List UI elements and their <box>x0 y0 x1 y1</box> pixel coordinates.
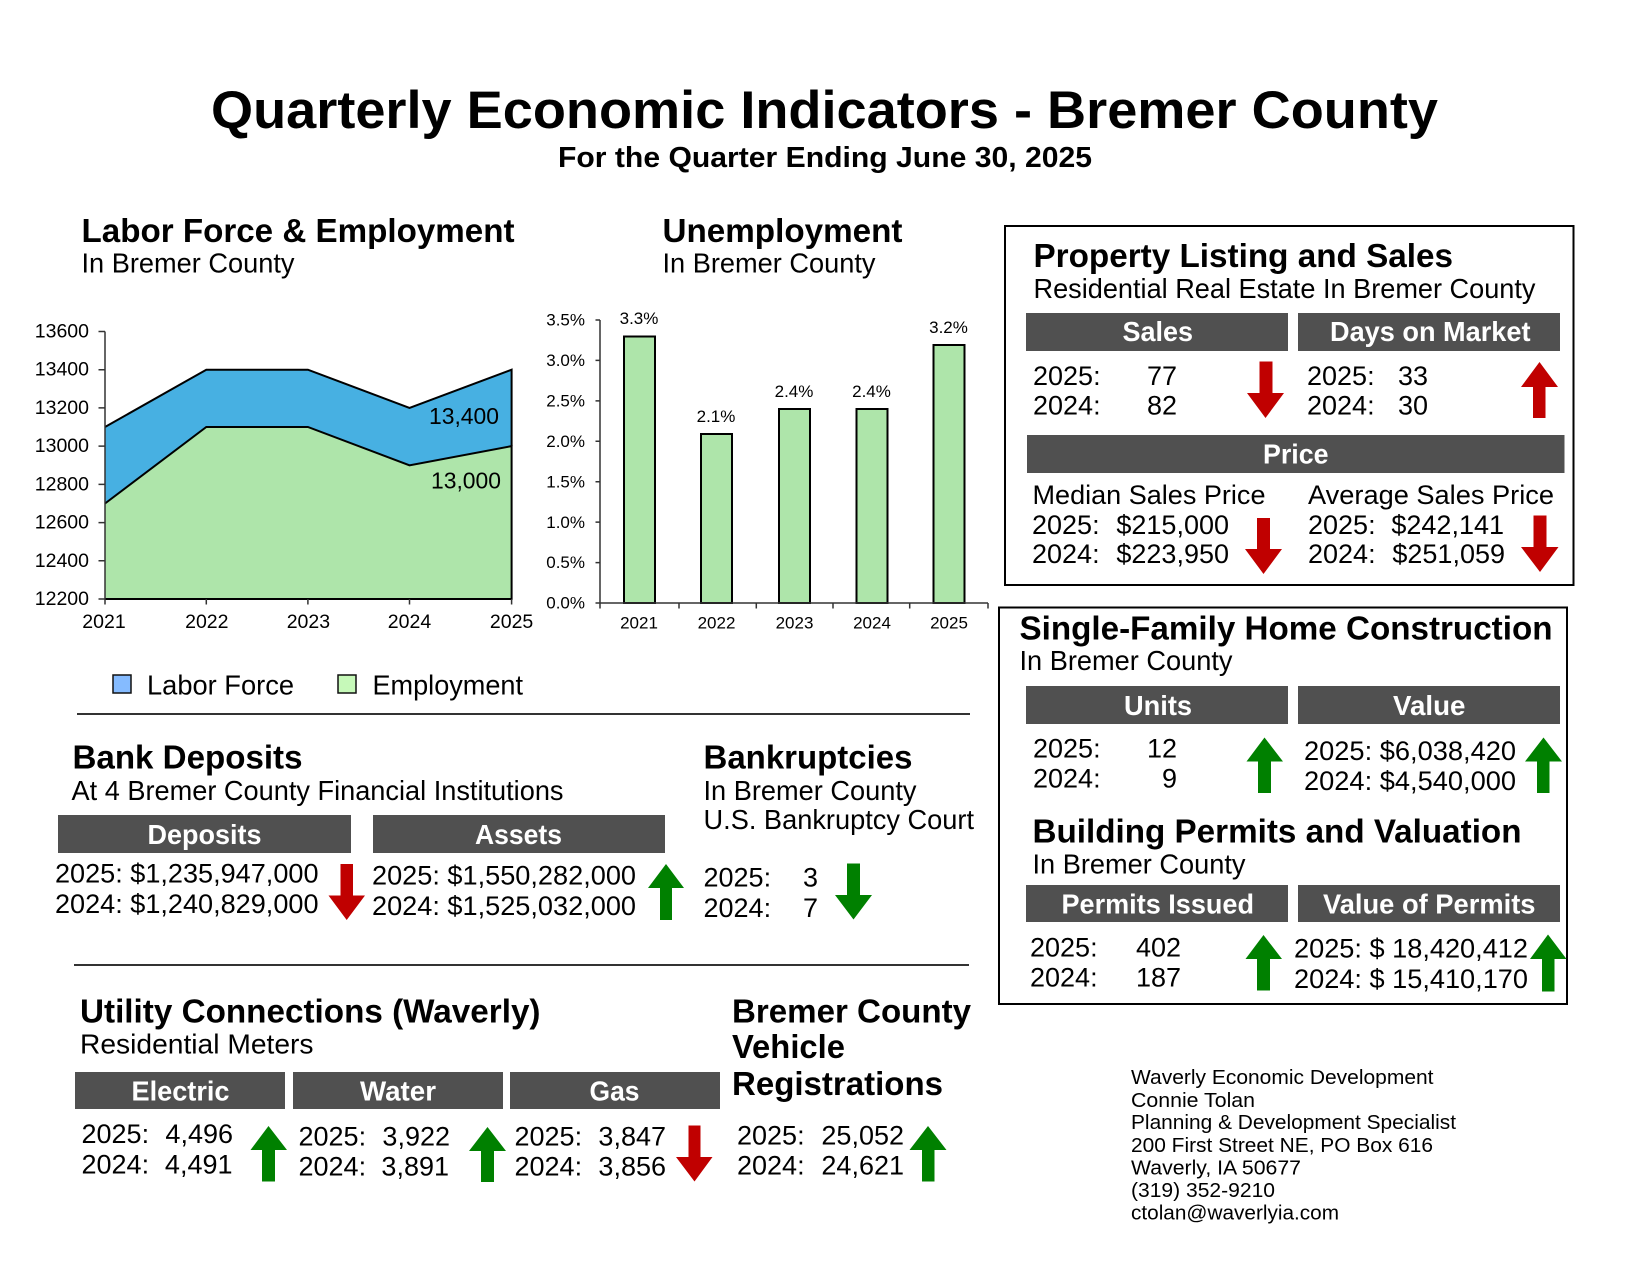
bar chart: unemployment: 2024 <box>853 614 891 632</box>
area chart: labor force and employment: 12600 <box>35 512 89 534</box>
icon: green up arrow electric <box>250 1126 287 1182</box>
area chart: labor force and employment: 2025 <box>490 611 533 633</box>
days on market values: 2024: <box>1307 390 1375 420</box>
vehicle registration values: 2024: <box>737 1150 805 1180</box>
icon: red down arrow gas <box>676 1126 712 1182</box>
heading: unemployment: Unemployment <box>662 212 902 249</box>
heading: vehicle registrations: Bremer County <box>732 992 972 1030</box>
deposits values <box>55 858 318 919</box>
deposits header <box>58 815 351 853</box>
contact block: Waverly Economic Development <box>1131 1066 1434 1089</box>
price header <box>1027 435 1564 473</box>
bar chart: unemployment <box>546 309 988 632</box>
bar chart: unemployment: 2.4% <box>852 382 891 401</box>
water header <box>293 1072 503 1109</box>
permits issued values: 2024: <box>1030 962 1098 992</box>
electric values: 2024: <box>82 1150 149 1180</box>
icon: red down arrow average price <box>1521 516 1558 572</box>
bar chart: unemployment: 3.0% <box>546 351 585 370</box>
days on market values: 33 <box>1398 361 1428 391</box>
panel: utility connections <box>75 992 720 1182</box>
electric values: 4,496 <box>165 1119 233 1149</box>
gas header <box>510 1072 720 1109</box>
water values: 2025: <box>298 1122 366 1152</box>
bar chart: unemployment: 2021 <box>620 614 658 632</box>
average sales price <box>1308 480 1554 569</box>
assets header: Assets <box>475 819 562 850</box>
panel: bankruptcies <box>704 738 974 923</box>
permits issued values <box>1030 932 1181 992</box>
area chart: labor force and employment: 2021 <box>82 611 126 633</box>
median sales price: Median Sales Price <box>1032 480 1266 510</box>
heading: single-family home construction: Single-Family Home Construction <box>1020 610 1552 646</box>
bar chart: unemployment: 2022 <box>698 614 735 632</box>
bar chart: unemployment: 3.2% <box>929 318 968 337</box>
permits issued values: 402 <box>1136 932 1181 962</box>
icon: red down arrow sales <box>1247 362 1284 418</box>
subheading: bankruptcies: In Bremer County <box>704 775 917 806</box>
contact block <box>1131 1066 1456 1224</box>
assets values: 2025: $1,550,282,000 <box>372 860 636 890</box>
sales values: 82 <box>1147 390 1177 420</box>
bar chart: unemployment: 2.1% <box>697 407 735 426</box>
icon: green up arrow water <box>469 1127 506 1182</box>
water values <box>298 1122 450 1182</box>
deposits values: 2025: $1,235,947,000 <box>55 858 318 888</box>
days on market header <box>1298 313 1560 351</box>
title: Quarterly Economic Indicators - Bremer County <box>211 81 1439 140</box>
heading: utility connections: Utility Connections (Waverly) <box>80 992 540 1030</box>
vehicle registration values: 24,621 <box>821 1150 904 1180</box>
days on market values: 30 <box>1398 390 1428 420</box>
vehicle registration values: 25,052 <box>821 1120 904 1150</box>
subheading: labor force: In Bremer County <box>82 248 295 278</box>
sales values <box>1033 361 1177 420</box>
area chart: labor force and employment: 13600 <box>35 320 89 342</box>
median sales price: $215,000 <box>1116 510 1229 540</box>
water values: 3,922 <box>382 1122 450 1152</box>
value of permits header <box>1298 885 1560 922</box>
area chart: labor force and employment: 13000 <box>35 435 89 457</box>
bankruptcies values <box>704 862 818 923</box>
icon: green down arrow bankruptcies <box>835 864 872 920</box>
sales header: Sales <box>1122 316 1193 347</box>
contact block: Planning & Development Specialist <box>1131 1111 1456 1134</box>
units header: Units <box>1124 690 1192 721</box>
bar chart: unemployment: 1.5% <box>546 472 585 492</box>
permits issued values: 187 <box>1136 962 1181 992</box>
panel: single-family home construction <box>999 608 1567 1004</box>
deposits values: 2024: $1,240,829,000 <box>55 889 318 919</box>
area chart: labor force and employment: 12200 <box>35 588 89 610</box>
median sales price <box>1032 480 1266 569</box>
bar chart: unemployment: 1.0% <box>546 513 585 532</box>
value values: 2024: $4,540,000 <box>1304 766 1516 796</box>
units values: 2025: <box>1033 734 1101 764</box>
icon: green up arrow permits <box>1246 935 1282 990</box>
area chart: labor force and employment: 2022 <box>185 611 228 633</box>
bankruptcies values: 2025: <box>704 862 771 892</box>
panel: property listing and sales <box>1005 226 1574 585</box>
subheading: bank deposits: At 4 Bremer County Financial Institutions <box>72 775 564 806</box>
water header: Water <box>360 1076 436 1106</box>
average sales price: $242,141 <box>1391 510 1504 540</box>
contact block: 200 First Street NE, PO Box 616 <box>1131 1134 1433 1157</box>
electric header <box>75 1072 285 1109</box>
assets values: 2024: $1,525,032,000 <box>372 891 636 921</box>
gas values <box>514 1122 666 1182</box>
subheading: bankruptcies <box>704 775 974 835</box>
water values: 2024: <box>298 1152 366 1182</box>
average sales price: 2025: <box>1308 510 1376 540</box>
sales values: 2025: <box>1033 361 1101 391</box>
heading: labor force: Labor Force & Employment <box>82 212 515 249</box>
icon: red up arrow days on market <box>1521 362 1558 418</box>
bar chart: unemployment: 0.0% <box>546 594 585 612</box>
bar chart: unemployment: 2023 <box>776 614 813 632</box>
icon: green up arrow vehicles <box>910 1126 946 1182</box>
units values: 12 <box>1147 734 1177 764</box>
subtitle: For the Quarter Ending June 30, 2025 <box>558 142 1092 174</box>
heading: bankruptcies: Bankruptcies <box>704 738 912 776</box>
value values: 2025: $6,038,420 <box>1304 736 1516 766</box>
median sales price: $223,950 <box>1116 539 1229 569</box>
sales values: 77 <box>1147 361 1177 391</box>
units values <box>1033 734 1177 794</box>
area chart: labor force and employment: 2023 <box>287 611 330 633</box>
icon: green up arrow assets <box>648 864 684 920</box>
average sales price: $251,059 <box>1392 539 1505 569</box>
bar chart: unemployment: 2.5% <box>546 392 585 410</box>
area chart: labor force and employment: 12800 <box>35 473 89 495</box>
heading: property listing: Property Listing and Sales <box>1034 237 1453 274</box>
value of permits header: Value of Permits <box>1323 888 1536 920</box>
legend: Employment <box>372 670 523 700</box>
permits issued header: Permits Issued <box>1062 888 1254 920</box>
panel: unemployment <box>546 212 988 632</box>
value of permits values: 2024: $ 15,410,170 <box>1294 964 1528 994</box>
gas values: 3,856 <box>598 1152 666 1182</box>
area chart: labor force and employment: 12400 <box>35 550 89 572</box>
legend: Labor Force <box>147 670 294 700</box>
heading: vehicle registrations: Vehicle <box>732 1028 845 1065</box>
contact block: Waverly, IA 50677 <box>1131 1156 1301 1180</box>
bar chart: unemployment: 0.5% <box>546 553 585 572</box>
units values: 2024: <box>1033 764 1101 794</box>
assets values <box>372 860 636 921</box>
electric values: 4,491 <box>165 1150 232 1180</box>
heading: bank deposits: Bank Deposits <box>72 738 302 776</box>
area chart: labor force and employment: 13400 <box>35 359 89 381</box>
assets header <box>373 815 665 853</box>
heading: vehicle registrations <box>732 992 972 1102</box>
panel: bank deposits <box>55 738 684 921</box>
panel: vehicle registrations <box>732 992 972 1182</box>
contact block: Connie Tolan <box>1131 1089 1255 1112</box>
area chart: labor force and employment: 2024 <box>388 611 431 633</box>
gas values: 2025: <box>514 1122 582 1152</box>
water values: 3,891 <box>381 1152 449 1182</box>
median sales price: 2025: <box>1032 510 1100 540</box>
icon: green up arrow value <box>1525 738 1562 793</box>
bankruptcies values: 3 <box>803 862 818 892</box>
bar chart: unemployment: 2.0% <box>546 432 585 451</box>
average sales price: Average Sales Price <box>1308 480 1554 510</box>
bankruptcies values: 2024: <box>704 893 771 923</box>
units values: 9 <box>1162 764 1177 794</box>
subheading: utility connections: Residential Meters <box>80 1028 314 1060</box>
subheading: bankruptcies: U.S. Bankruptcy Court <box>704 804 974 835</box>
contact block: ctolan@waverlyia.com <box>1131 1202 1339 1224</box>
heading: vehicle registrations: Registrations <box>732 1065 943 1102</box>
area chart: labor force and employment: 13,000 <box>431 468 501 494</box>
vehicle registration values <box>737 1120 904 1180</box>
value of permits values: 2025: $ 18,420,412 <box>1294 934 1528 964</box>
subheading: single-family: In Bremer County <box>1020 645 1233 676</box>
gas header: Gas <box>590 1076 640 1106</box>
days on market values <box>1307 361 1428 420</box>
median sales price: 2024: <box>1032 539 1100 569</box>
sales header <box>1026 313 1288 351</box>
bar chart: unemployment: 2.4% <box>775 382 813 401</box>
bar chart: unemployment: 3.5% <box>546 310 585 330</box>
deposits header: Deposits <box>148 819 262 850</box>
price header: Price <box>1263 438 1328 470</box>
electric values: 2025: <box>82 1119 149 1149</box>
bankruptcies values: 7 <box>803 893 818 923</box>
value header: Value <box>1393 690 1466 721</box>
days on market values: 2025: <box>1307 361 1375 391</box>
legend <box>113 670 523 700</box>
value header <box>1298 686 1560 724</box>
bar chart: unemployment: 3.3% <box>620 309 658 328</box>
permits issued values: 2025: <box>1030 932 1098 962</box>
icon: red down arrow deposits <box>328 864 365 920</box>
electric header: Electric <box>132 1076 230 1106</box>
gas values: 2024: <box>514 1152 582 1182</box>
area chart: labor force and employment: 13200 <box>35 397 89 419</box>
vehicle registration values: 2025: <box>737 1120 805 1150</box>
subheading: property listing: Residential Real Estate In Bremer County <box>1034 273 1536 304</box>
gas values: 3,847 <box>598 1122 666 1152</box>
average sales price: 2024: <box>1308 539 1376 569</box>
icon: red down arrow median price <box>1245 518 1282 574</box>
electric values <box>82 1119 233 1180</box>
subheading: building permits: In Bremer County <box>1032 848 1246 880</box>
area chart: labor force and employment: 13,400 <box>429 403 499 429</box>
heading: building permits: Building Permits and Valuation <box>1032 812 1522 850</box>
days on market header: Days on Market <box>1330 316 1530 347</box>
value of permits values <box>1294 934 1528 994</box>
panel: labor force and employment <box>35 212 533 700</box>
subheading: unemployment: In Bremer County <box>662 248 876 278</box>
permits issued header <box>1026 885 1288 922</box>
contact block: (319) 352-9210 <box>1131 1179 1275 1202</box>
units header <box>1026 686 1288 724</box>
bar chart: unemployment: 2025 <box>930 614 968 632</box>
area chart: labor force and employment <box>35 320 533 633</box>
icon: green up arrow value of permits <box>1530 934 1566 992</box>
icon: green up arrow units <box>1246 738 1283 793</box>
sales values: 2024: <box>1033 390 1101 420</box>
value values <box>1304 736 1516 796</box>
